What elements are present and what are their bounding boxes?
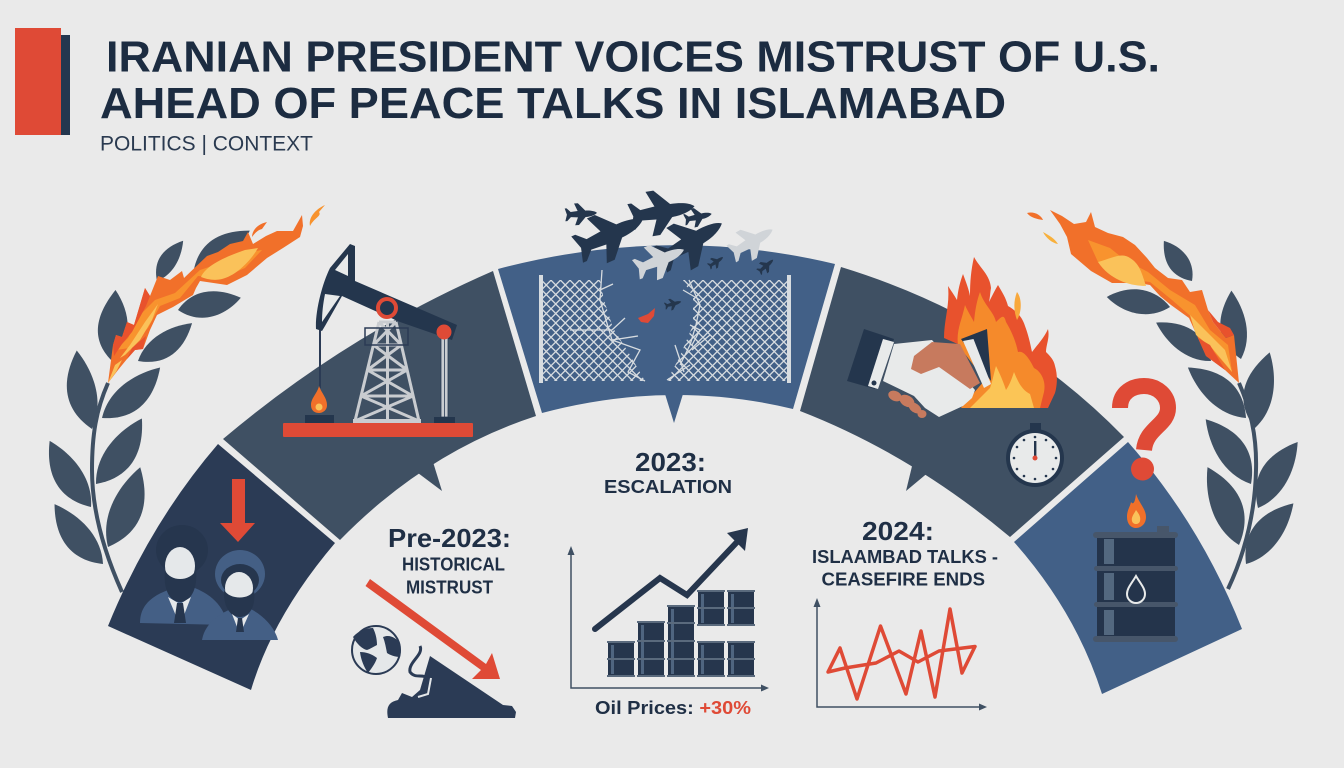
rising arrow [595, 541, 738, 629]
arc segment 5: oil barrel [1014, 442, 1242, 694]
oil drop [1127, 576, 1145, 603]
title: AHEAD OF PEACE TALKS IN ISLAMABAD [100, 79, 1006, 128]
barrel highlights [611, 594, 734, 674]
pointer segment 2 [418, 462, 442, 491]
flame [311, 386, 327, 413]
title [100, 32, 1160, 128]
label: pre-2023 [388, 523, 511, 598]
left figure [140, 525, 228, 625]
derrick [353, 322, 421, 421]
subtitle: POLITICS | CONTEXT [100, 132, 313, 156]
right laurel branch [1105, 235, 1307, 589]
label: 2024: 2024: [862, 516, 934, 546]
icon: two clerics with down arrow [140, 479, 278, 640]
fence posts [539, 275, 543, 383]
fingers [887, 389, 926, 418]
icon: oil pump [283, 244, 473, 437]
red platform [283, 423, 473, 437]
label: 2023 [604, 447, 732, 497]
left laurel branch [35, 218, 256, 592]
pivot [378, 299, 396, 317]
skin hand [911, 342, 980, 389]
icon: broken fence [539, 270, 791, 383]
barrel [1097, 533, 1175, 639]
timeline arc [108, 245, 1242, 694]
arc segment 3: escalation [498, 245, 835, 413]
icon: planes [564, 185, 781, 312]
red down arrow [220, 479, 255, 542]
burst [638, 308, 655, 323]
icon: burning handshake [847, 257, 1057, 418]
label: oil prices: Oil Prices: +30% [595, 698, 751, 718]
arc segment 2: oil [223, 271, 536, 540]
pointer segment 4 [906, 458, 930, 491]
label: pre-2023: HISTORICAL [402, 554, 505, 574]
barrels [608, 592, 754, 676]
icon: stopwatch [1006, 423, 1064, 487]
fire [944, 257, 1057, 408]
rubble [387, 656, 516, 718]
left cuff [847, 329, 894, 389]
cracks [570, 270, 710, 381]
label: 2024: ISLAAMBAD TALKS - [812, 547, 998, 567]
chart: volatile oil line [814, 598, 987, 710]
chart: decline arrow with globe and rubble [352, 579, 516, 718]
barrel rings [607, 590, 755, 677]
flame [1127, 494, 1146, 528]
label: 2024 [812, 516, 998, 590]
header accent block [15, 28, 70, 135]
icon: question mark [1120, 386, 1168, 480]
title: IRANIAN PRESIDENT VOICES MISTRUST OF U.S. [106, 32, 1160, 82]
beam and horsehead [316, 244, 457, 340]
label: 2024: CEASEFIRE ENDS [822, 570, 985, 590]
right figure [202, 550, 278, 640]
chart: oil prices rising [568, 528, 769, 692]
left flame [108, 205, 325, 383]
globe [352, 626, 401, 674]
white hand [883, 340, 975, 417]
axes [571, 550, 764, 688]
mesh left [543, 280, 645, 381]
arc segment 1: pre-2023 [108, 444, 335, 690]
right flame [1027, 210, 1239, 383]
label: pre-2023: MISTRUST [406, 578, 493, 598]
gear box [365, 328, 408, 345]
right cuff [961, 329, 991, 381]
red line [828, 609, 975, 699]
label: 2023: 2023: [635, 447, 706, 477]
arc segment 4: talks [800, 267, 1124, 537]
pointer segment 3 [665, 394, 683, 423]
label: 2023: ESCALATION [604, 476, 732, 497]
axes [817, 602, 982, 707]
icon: oil barrel with flame [1093, 494, 1178, 642]
label: pre-2023: Pre-2023: [388, 523, 511, 553]
mesh right [667, 280, 787, 381]
support rods [441, 335, 448, 417]
red arrow [366, 579, 500, 679]
